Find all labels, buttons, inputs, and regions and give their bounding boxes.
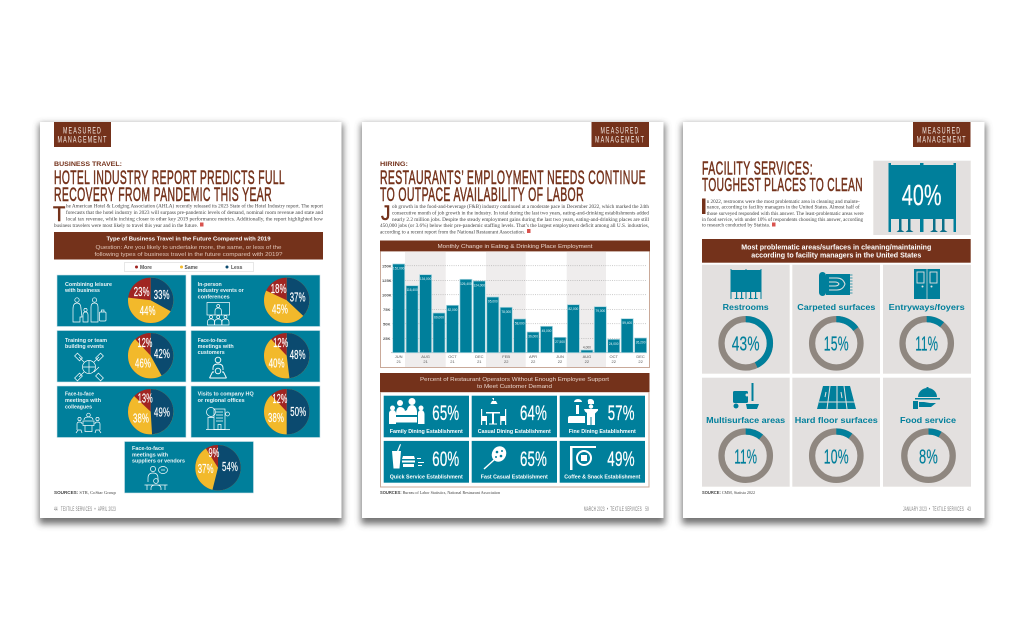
icon: meeting table [76,413,101,433]
grid title bar: Most problematic areas/surfaces in cleaning/maintaining [741,242,931,252]
x axis: 22 [558,359,563,364]
heading: HOTEL INDUSTRY REPORT PREDICTS FULL [54,167,285,189]
tile: family dining [384,396,469,437]
pie chart [128,333,173,378]
intro text: in food service, with under 10% of respondents choosing this answer, according [702,216,863,223]
tile: fast casual [472,441,557,483]
values: 37% [290,290,306,304]
bar values: 78,000 [501,310,511,314]
icon: double doors [914,269,940,299]
values: 37% [198,462,214,476]
y axis: 75K [383,307,390,312]
panel: combining leisure: with business [64,288,100,294]
panel: colleagues: meetings with [65,398,101,404]
intro text: T [53,203,66,226]
y axis [382,264,392,341]
panel: hotel industry report page [40,122,342,518]
tile: hard floor [792,378,880,487]
tile: carpeted surfaces: Carpeted surfaces [797,303,876,312]
icon: team hands [75,353,103,381]
tile: entryways: Entryways/foyers [889,303,965,312]
intro text: business travelers were most likely to travel this year and in the future. [54,222,198,229]
values [133,392,170,426]
values: 13% [138,392,153,406]
icon: floor boards [817,386,856,409]
source: SOURCES: Bureau of Labor Statistics, National Restaurant Association [380,490,501,496]
x axis: JUN [395,354,403,359]
icon: two people facing [210,357,226,378]
pie chart [128,389,173,434]
values: 49% [154,406,170,420]
icon: person at desk with speech bubble [144,466,168,490]
icon: carpet roll [819,272,852,296]
x axis: JUN [556,354,564,359]
panel: training: building events [65,344,104,350]
icon: family with luggage [73,298,106,322]
heading [380,167,646,206]
intro text [702,198,864,228]
panel: in-person events: In-person [198,282,222,288]
icon: hanging cafe sign [570,446,596,470]
tile: fast casual: 65% [520,447,547,471]
section badge [592,122,649,147]
intro text: nance, according to facility managers in the United States. Almost half of [707,204,860,210]
y axis: 25K [383,336,390,341]
chart title bar [54,232,323,260]
operators title: to Meet Customer Demand [477,384,552,390]
values: 33% [154,288,170,302]
kicker: HIRING: [380,161,408,168]
values [269,336,306,370]
values: 50% [290,405,306,419]
intro text: nearly 2.2 million jobs. Despite the steady employment gains during the last two years, eating-and-drinking places are still [392,217,650,223]
panel: customers: customers [198,350,225,356]
intro text: ob growth in the food-and-beverage (F&B) industry continued at a moderate pace in December 2022, which marked the 24th [392,203,649,210]
intro text: those surveyed responded with this answer. The least-problematic areas were [707,211,864,217]
legend: Same [184,265,198,271]
operators title [380,373,650,392]
panel: colleagues: colleagues [65,404,92,410]
pie chart [264,278,309,323]
panel: visits to HQ: Visits to company HQ [198,392,254,398]
donut chart [722,432,770,480]
panel: restaurant employment page: MARCH 2023 • TEXTILE SERVICES 59 [584,507,649,513]
tile: restrooms: Restrooms [723,303,769,312]
intro text: according to a recent report from the National Restaurant Association. [380,228,525,235]
panel: suppliers: meetings with [132,452,168,458]
grid title bar [702,239,971,263]
panel: training [57,330,186,382]
values [135,336,170,370]
chart title: Monthly Change in Eating & Drinking Place Employment [438,244,593,250]
x axis: OCT [448,354,457,359]
icon: cafe table [481,398,506,425]
bar values: 126,400 [460,282,472,286]
bar values: 95,000 [488,300,498,304]
pie chart [128,278,173,323]
donut chart [904,432,953,480]
x axis: DEC [636,354,645,359]
x axis: 21 [396,359,402,364]
panel: visits to HQ: or regional offices [198,398,245,404]
grid title bar: according to facility managers in the United States [751,250,921,260]
pie chart [264,333,309,378]
tile: casual dining [472,396,557,437]
x axis: OCT [609,354,618,359]
bar values [393,266,646,350]
values: 23% [134,285,150,299]
icon: food pick [484,444,509,469]
values [134,285,170,318]
values [198,446,238,476]
panel: training: Training or team [65,338,107,344]
chart title bar: Type of Business Travel in the Future Compared with 2019 [106,236,271,242]
tile: family dining: Family Dining Establishment [390,429,463,435]
heading [54,167,285,206]
heading: TO OUTPACE AVAILABILITY OF LABOR [380,184,584,206]
bar chart panel [380,240,650,368]
bar values: 124,000 [474,284,485,288]
callout: 40 percent restroom stall [873,161,971,235]
section badge: MANAGEMENT [595,135,645,146]
panel: visits to HQ [191,386,320,438]
callout: 40 percent restroom stall: 40% [902,180,942,212]
values: 12% [272,392,288,406]
tile: fine dining: Fine Dining Establishment [569,429,636,435]
bar values: 58,000 [515,322,525,326]
legend: Less [231,265,243,271]
section badge: MEASURED [922,125,961,136]
bar values: 152,000 [393,266,405,270]
icon: waiter and table [568,399,598,425]
x axis: DEC [475,354,484,359]
operators title: Percent of Restaurant Operators Without Enough Employee Support [420,377,609,383]
x axis: APR [529,354,537,359]
intro text: J [381,202,391,225]
tile: fine dining [560,396,645,437]
x axis: 21 [477,359,482,364]
section badge: MANAGEMENT [58,135,108,146]
panel: colleagues: Face-to-face [65,392,94,398]
values: 44% [140,304,156,318]
tile: quick service: 60% [432,447,459,471]
tile: restrooms: 43% [732,334,760,356]
x axis: 22 [611,359,617,364]
heading: RECOVERY FROM PANDEMIC THIS YEAR [54,184,272,206]
bars [393,264,647,353]
panel: in-person events: industry events or [198,288,244,294]
source: SOURCES: STR, CoStar Group [54,490,116,496]
section badge: MANAGEMENT [917,135,967,146]
tile: coffee and snack: Coffee & Snack Establishment [564,474,640,480]
chart title bar: following types of business travel in the future compared with 2019? [94,252,282,258]
x axis: 22 [531,359,536,364]
x axis: 21 [423,359,429,364]
values [271,282,306,316]
panel: customers: Face-to-face [198,338,227,344]
tile: coffee and snack [560,441,645,483]
tile: hard floor: Hard floor surfaces [795,415,878,425]
icon: soda and burger [392,444,424,468]
chart title bar: Question: Are you likely to undertake more, the same, or less of the [96,245,282,251]
heading [702,158,863,195]
chart title [380,240,650,251]
operators panel [380,373,650,487]
tile: carpeted surfaces [792,265,880,374]
donut chart [812,432,860,480]
donut chart [812,319,860,368]
panel: colleagues [57,386,186,438]
bar values: 27,500 [555,340,565,344]
panel: restaurant employment page [362,122,664,518]
legend [124,262,254,272]
section badge [913,122,970,147]
donut chart [902,319,951,368]
bar values: 26,200 [636,340,646,344]
icon: cloche on hand [913,387,940,409]
pie chart [195,445,241,490]
icon: office building [206,408,230,430]
panel: in-person events: conferences [198,294,230,300]
tile: multisurface: 11% [734,446,757,468]
bar values: 4,000 [583,346,591,350]
pie chart [264,389,309,434]
tile: hard floor: 10% [824,446,849,468]
panel: hotel industry report page: 44 TEXTILE SERVICES • APRIL 2023 [54,507,116,513]
heading: TOUGHEST PLACES TO CLEAN [702,174,863,195]
intro text: he American Hotel & Lodging Association (AHLA) recently released its 2023 State of the Hotel Industry report. The report [66,202,324,210]
values: 40% [269,356,285,370]
tile: quick service [384,441,469,483]
tile: family dining: 65% [432,401,459,425]
bar values: 24,000 [609,342,619,346]
intro text: consecutive month of job growth in the industry. In total during the last two years, eating-and-drinking establishments added [392,209,649,216]
bar values: 59,400 [622,321,632,325]
x axis: AUG [583,354,591,359]
intro text: forecasts that the hotel industry in 2023 will surpass pre-pandemic levels of demand, nominal room revenue and state and [66,209,323,216]
intro text: to research conducted by Statista. [702,222,770,228]
tile: entryways [883,265,971,374]
heading: FACILITY SERVICES: [702,158,813,178]
values [268,392,306,425]
bar values: 45,000 [542,329,552,333]
values: 38% [268,411,284,425]
panel: customers: meetings with [198,344,234,350]
bar values: 36,000 [528,334,538,338]
panel: suppliers [124,442,254,493]
bar values: 82,000 [448,308,458,312]
values: 54% [222,460,238,474]
donut chart [722,319,770,368]
panel: in-person events [191,275,320,326]
bar values: 69,000 [434,316,444,320]
x axis: 22 [585,359,590,364]
values: 46% [135,356,151,370]
icon: family at table [389,398,424,424]
kicker: BUSINESS TRAVEL: [54,161,122,168]
tile: restrooms [702,265,790,374]
tile: multisurface [702,378,790,487]
panel: combining leisure [57,275,186,326]
section badge: MEASURED [63,125,102,136]
tile: food service [883,378,971,487]
tile: food service: Food service [900,415,956,425]
tile: food service: 8% [919,446,938,468]
y axis: 150K [382,264,392,268]
values: 9% [208,446,220,460]
section badge: MEASURED [600,125,640,136]
y axis: 100K [382,292,392,298]
y axis: 125K [382,278,392,283]
intro text [53,202,324,229]
tile: carpeted surfaces: 15% [824,334,849,356]
intro text: n 2022, restrooms were the most problematic area in cleaning and mainte- [707,199,860,205]
tile: quick service: Quick Service Establishment [390,474,463,480]
tile: entryways: 11% [915,334,938,356]
panel: customers [191,330,320,382]
x axis: 21 [450,359,455,364]
panel: suppliers: Face-to-face [132,446,164,452]
panel: combining leisure: Combining leisure [65,282,112,288]
values: 42% [154,347,170,361]
intro text [380,202,650,235]
bar values: 134,000 [420,277,432,281]
icon: floor scrubber [733,383,759,409]
tile: multisurface: Multisurface areas [706,415,785,425]
values: 45% [272,302,288,316]
x axis: 22 [638,359,644,364]
tile: fast casual: Fast Casual Establishment [481,474,548,480]
legend: More [140,265,152,271]
x axis [395,354,645,364]
bar values: 82,000 [569,307,579,311]
tile: coffee and snack: 49% [607,447,635,471]
values: 12% [273,336,288,350]
bar values: 79,000 [595,309,605,313]
icon: conference audience [207,302,230,325]
values: 38% [133,412,149,426]
x axis: FEB [502,354,510,359]
values: 48% [290,348,306,362]
section badge [54,122,111,147]
y axis: 50K [383,322,390,326]
tile: fine dining: 57% [608,401,635,425]
x axis: AUG [421,354,430,359]
panel: facility services page [683,122,984,518]
intro text: 450,000 jobs (or 3.6%) below their pre-pandemic staffing levels. That’s the largest employment deficit among all U.S. industries, [380,222,649,229]
x axis: 22 [504,359,509,364]
source: SOURCE: CMM, Statista 2022 [702,490,756,496]
tile: casual dining: 64% [520,401,547,425]
panel: suppliers: suppliers or vendors [132,458,185,464]
intro text: local tax revenue, while inching closer to other key 2019 performance metrics. Additionally, the report highlighted how [66,216,323,222]
values: 12% [138,336,152,350]
bar values: 116,400 [406,288,418,292]
icon: restroom stall [730,269,762,299]
heading: RESTAURANTS’ EMPLOYMENT NEEDS CONTINUE [380,167,646,189]
tile: casual dining: Casual Dining Establishment [478,429,551,435]
values: 18% [271,282,287,296]
